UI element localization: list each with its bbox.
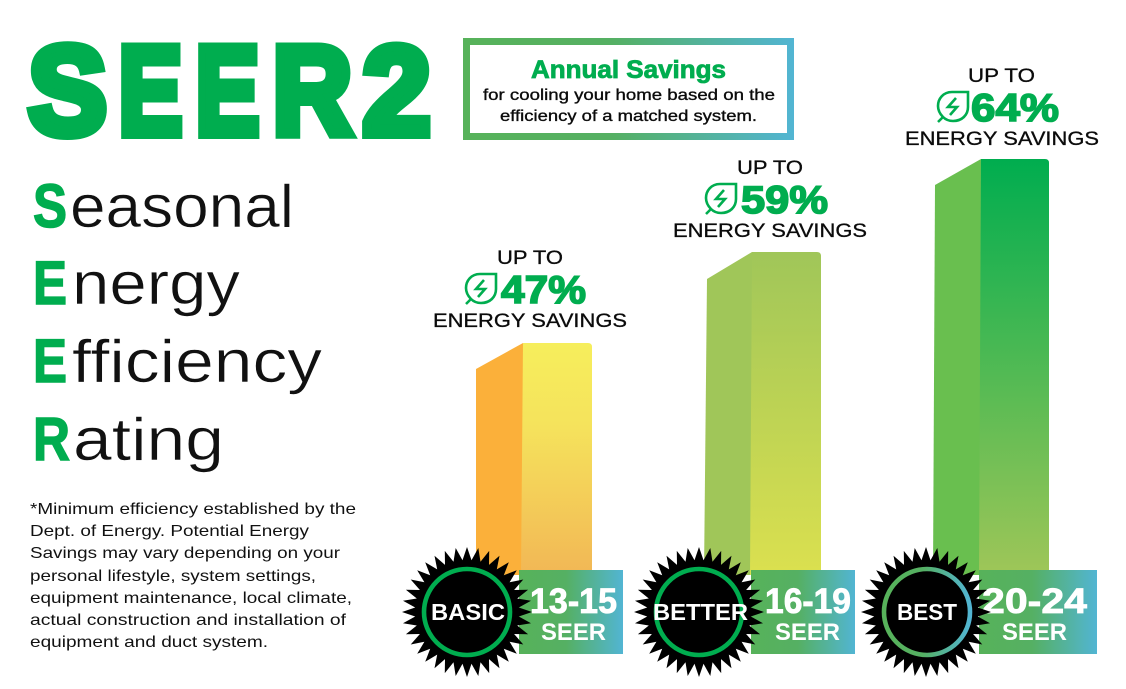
title: SEER2: R xyxy=(273,20,352,161)
savings label: 64%: UP TO xyxy=(968,65,1035,87)
line: Seasonal: S xyxy=(33,172,67,240)
footnote text: actual construction and installation of xyxy=(30,612,347,629)
savings label: 47%: 47% xyxy=(501,269,586,312)
icon: leaf with bolt xyxy=(466,274,496,304)
range box: 13-15 SEER: 13-15 xyxy=(530,582,617,621)
badge: BEST xyxy=(861,547,991,677)
savings label: 59%: UP TO xyxy=(737,157,803,179)
badge: BEST: BEST xyxy=(897,599,957,625)
column: BETTER xyxy=(634,157,867,677)
line: Seasonal: easonal xyxy=(70,173,294,240)
title: SEER2: E xyxy=(119,20,182,161)
callout: Annual Savings: efficiency of a matched system. xyxy=(500,108,757,125)
savings label: 59%: 59% xyxy=(741,179,828,222)
callout: Annual Savings xyxy=(463,38,794,140)
footnote text: Dept. of Energy. Potential Energy xyxy=(30,523,309,540)
savings label: 64% xyxy=(905,65,1099,150)
callout: Annual Savings: for cooling your home based on the xyxy=(483,87,775,104)
column: BEST xyxy=(861,65,1099,677)
bar: basic xyxy=(476,343,592,575)
badge: BASIC xyxy=(402,547,532,677)
savings label: 47% xyxy=(433,247,627,332)
savings label: 47%: UP TO xyxy=(497,247,563,269)
footnote text xyxy=(30,501,356,651)
badge: BETTER: BETTER xyxy=(653,599,748,625)
footnote text: *Minimum efficiency established by the xyxy=(30,501,356,518)
footnote text: Savings may vary depending on your xyxy=(30,545,341,562)
acronym breakdown xyxy=(33,172,322,473)
range box: 16-19 SEER xyxy=(751,570,855,654)
savings label: 47%: ENERGY SAVINGS xyxy=(433,310,627,332)
line: Rating xyxy=(33,405,224,473)
footnote text: personal lifestyle, system settings, xyxy=(30,568,316,585)
title: SEER2: S xyxy=(28,21,107,161)
line: Efficiency: fficiency xyxy=(72,328,322,395)
range box: 20-24 SEER xyxy=(979,570,1097,654)
range box: 13-15 SEER xyxy=(519,570,623,654)
savings label: 64%: 64% xyxy=(971,87,1059,130)
badge: BETTER xyxy=(634,547,764,677)
bar: better xyxy=(704,252,821,575)
footnote text: equipment and duct system. xyxy=(30,634,268,651)
title: SEER2 xyxy=(28,20,430,161)
icon: leaf with bolt xyxy=(938,92,968,122)
footnote text: equipment maintenance, local climate, xyxy=(30,590,352,607)
badge: BASIC: BASIC xyxy=(431,599,505,625)
icon: leaf with bolt xyxy=(706,184,736,214)
savings label: 59%: ENERGY SAVINGS xyxy=(673,220,867,242)
range box: 13-15 SEER: SEER xyxy=(541,619,606,646)
line: Energy: E xyxy=(33,249,67,317)
title: SEER2: 2 xyxy=(363,22,430,161)
savings label: 59% xyxy=(673,157,867,242)
column: BASIC xyxy=(402,247,627,677)
range box: 20-24 SEER: 20-24 xyxy=(982,582,1088,621)
range box: 16-19 SEER: SEER xyxy=(775,619,840,646)
line: Rating: ating xyxy=(73,406,224,473)
bar: best xyxy=(933,159,1049,575)
title: SEER2: E xyxy=(196,20,259,161)
line: Rating: R xyxy=(33,405,70,473)
range box: 16-19 SEER: 16-19 xyxy=(765,582,851,621)
line: Energy: nergy xyxy=(72,250,240,317)
line: Efficiency: E xyxy=(33,327,67,395)
callout: Annual Savings: Annual Savings xyxy=(531,56,726,84)
savings label: 64%: ENERGY SAVINGS xyxy=(905,128,1099,150)
range box: 20-24 SEER: SEER xyxy=(1002,619,1067,646)
